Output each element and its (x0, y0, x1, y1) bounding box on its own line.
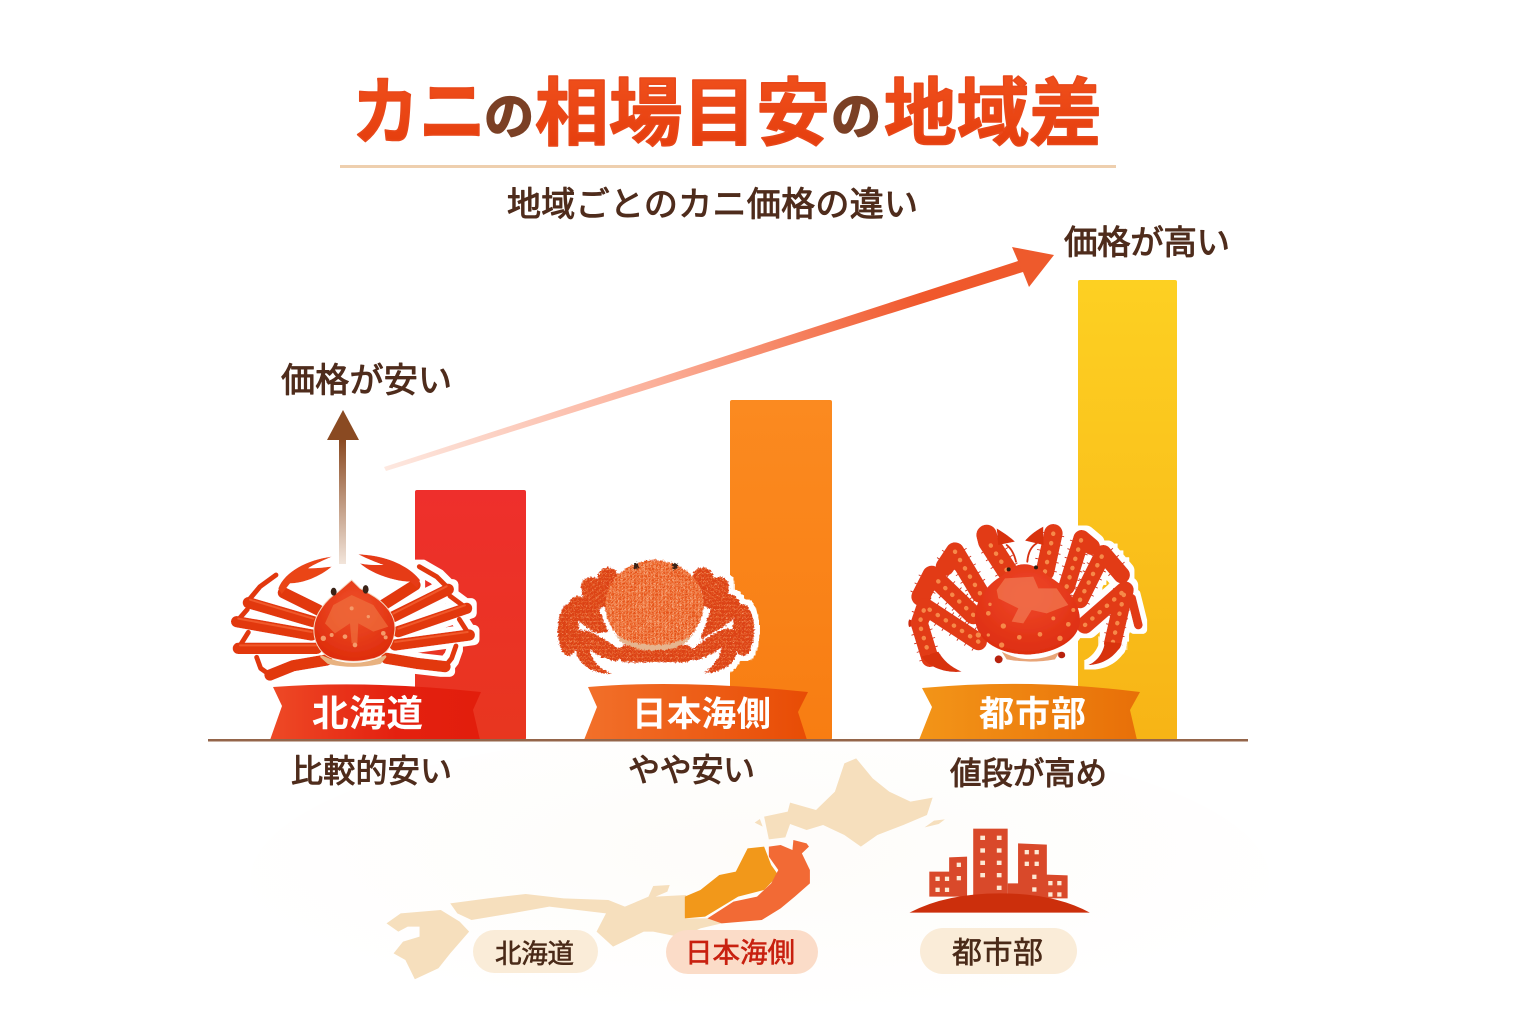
ribbon: 北海道 (270, 684, 481, 740)
title: カニ (352, 71, 486, 154)
pill: 北海道 (473, 930, 598, 973)
pill: 都市部 (920, 928, 1077, 974)
pill: 都市部: 都市部 (952, 937, 1043, 970)
ribbon: 日本海側: 日本海側 (632, 696, 771, 734)
ribbon: 都市部: 都市部 (979, 695, 1086, 734)
arrow: low price pointer (327, 410, 359, 564)
map: Hokkaido (755, 758, 945, 847)
bar: 日本海側 (730, 400, 832, 740)
map of Japan (387, 758, 945, 979)
arrow: rising price trend (384, 247, 1054, 471)
map: orange region (685, 847, 778, 918)
label: やや安い: やや安い (628, 752, 755, 788)
label: 値段が高め: 値段が高め (950, 755, 1107, 791)
ribbon: 日本海側 (584, 684, 808, 740)
title: 地域差 (884, 72, 1102, 155)
label: 比較的安い: 比較的安い (291, 753, 452, 789)
map: western Honshu (450, 885, 722, 947)
map: Kyushu (387, 910, 469, 979)
title: 相場目安 (535, 72, 830, 155)
icon: hairy crab (558, 560, 754, 674)
label: low price: 価格が安い (281, 362, 452, 400)
subtitle: 地域ごとのカニ価格の違い (507, 186, 918, 224)
ribbon: 北海道: 北海道 (312, 693, 423, 734)
title: の (831, 89, 881, 145)
pill: 北海道: 北海道 (495, 939, 574, 969)
icon: snow crab (237, 554, 469, 675)
map: red-orange region (707, 840, 810, 923)
bar: 都市部 (1078, 280, 1177, 740)
icon: city skyline (909, 829, 1090, 913)
pill: 日本海側 (666, 930, 818, 974)
title: の (484, 89, 534, 145)
ribbon: 都市部 (919, 684, 1140, 740)
bar: 北海道 (415, 490, 526, 740)
label: high price: 価格が高い (1064, 225, 1230, 262)
title (352, 71, 1102, 155)
icon: king crab (919, 527, 1138, 672)
pill: 日本海側: 日本海側 (685, 937, 795, 968)
